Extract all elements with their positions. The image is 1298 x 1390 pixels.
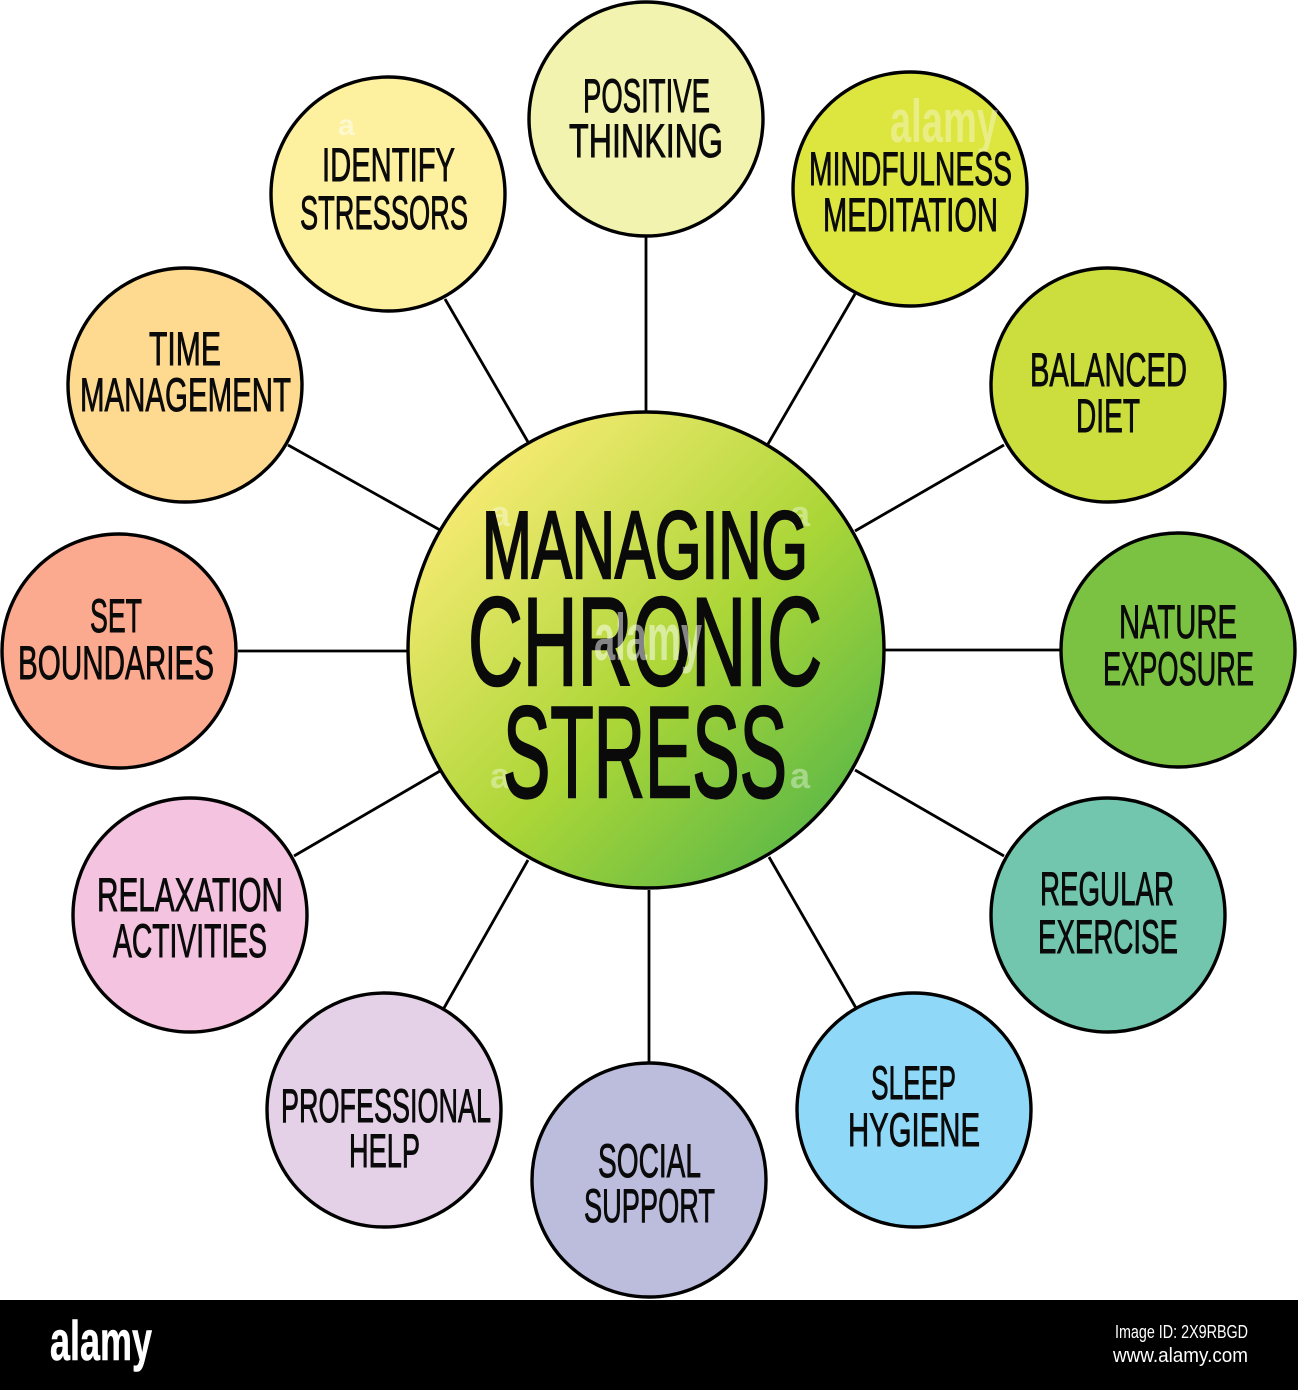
node: set boundaries: BOUNDARIES bbox=[18, 636, 214, 689]
node: regular exercise bbox=[991, 798, 1225, 1032]
node: regular exercise: EXERCISE bbox=[1038, 910, 1178, 963]
node: social support: SOCIAL bbox=[598, 1134, 701, 1187]
watermark: center corner marks: a bbox=[490, 755, 511, 796]
node: mindfulness meditation: MINDFULNESS bbox=[809, 142, 1012, 195]
node: balanced diet: BALANCED bbox=[1030, 343, 1187, 396]
title: chronic: CHRONIC bbox=[468, 573, 822, 712]
node: professional help: PROFESSIONAL bbox=[281, 1079, 491, 1132]
node: identify stressors: IDENTIFY bbox=[322, 138, 455, 191]
node: time management: TIME bbox=[149, 322, 221, 375]
watermark: center corner marks: a bbox=[790, 493, 811, 534]
node: social support bbox=[532, 1063, 766, 1297]
node: social support: SUPPORT bbox=[584, 1179, 715, 1232]
node: set boundaries bbox=[2, 534, 236, 768]
node: balanced diet bbox=[991, 268, 1225, 502]
title: stress: STRESS bbox=[503, 679, 787, 825]
node: sleep hygiene: SLEEP bbox=[871, 1056, 956, 1109]
node: sleep hygiene bbox=[797, 993, 1031, 1227]
watermark: center corner marks: a bbox=[490, 493, 511, 534]
watermark: node mark: a bbox=[338, 109, 355, 142]
node: relaxation activities bbox=[73, 798, 307, 1032]
node: set boundaries: SET bbox=[90, 589, 142, 642]
node: time management: MANAGEMENT bbox=[80, 368, 291, 421]
central circle: managing chronic stress bbox=[408, 412, 884, 888]
watermark: node logo: alamy bbox=[890, 88, 998, 155]
footer image id: Image ID: 2X9RBGD bbox=[1115, 1322, 1248, 1342]
node: positive thinking: POSITIVE bbox=[583, 69, 710, 122]
node: balanced diet: DIET bbox=[1076, 389, 1140, 442]
node: positive thinking: THINKING bbox=[569, 114, 723, 167]
title: managing: MANAGING bbox=[482, 492, 808, 599]
node: mindfulness meditation bbox=[793, 72, 1027, 306]
watermark: center corner marks: a bbox=[790, 755, 811, 796]
footer bar bbox=[0, 1300, 1298, 1390]
node: positive thinking bbox=[529, 2, 763, 236]
node: relaxation activities: RELAXATION bbox=[97, 868, 283, 921]
node: time management bbox=[68, 268, 302, 502]
node: professional help: HELP bbox=[349, 1124, 420, 1177]
node: relaxation activities: ACTIVITIES bbox=[113, 914, 267, 967]
node: professional help bbox=[267, 993, 501, 1227]
node: mindfulness meditation: MEDITATION bbox=[823, 188, 998, 241]
node: identify stressors bbox=[271, 77, 505, 311]
watermark: center logo: alamy bbox=[594, 600, 702, 674]
connector lines bbox=[238, 237, 1062, 1063]
footer logo: alamy: alamy bbox=[50, 1309, 152, 1372]
node: sleep hygiene: HYGIENE bbox=[848, 1103, 980, 1156]
footer website: www.alamy.com bbox=[1112, 1345, 1248, 1367]
node: nature exposure bbox=[1061, 533, 1295, 767]
watermark: center corner marks bbox=[490, 493, 811, 796]
node: identify stressors: STRESSORS bbox=[300, 186, 468, 239]
node: regular exercise: REGULAR bbox=[1040, 862, 1174, 915]
